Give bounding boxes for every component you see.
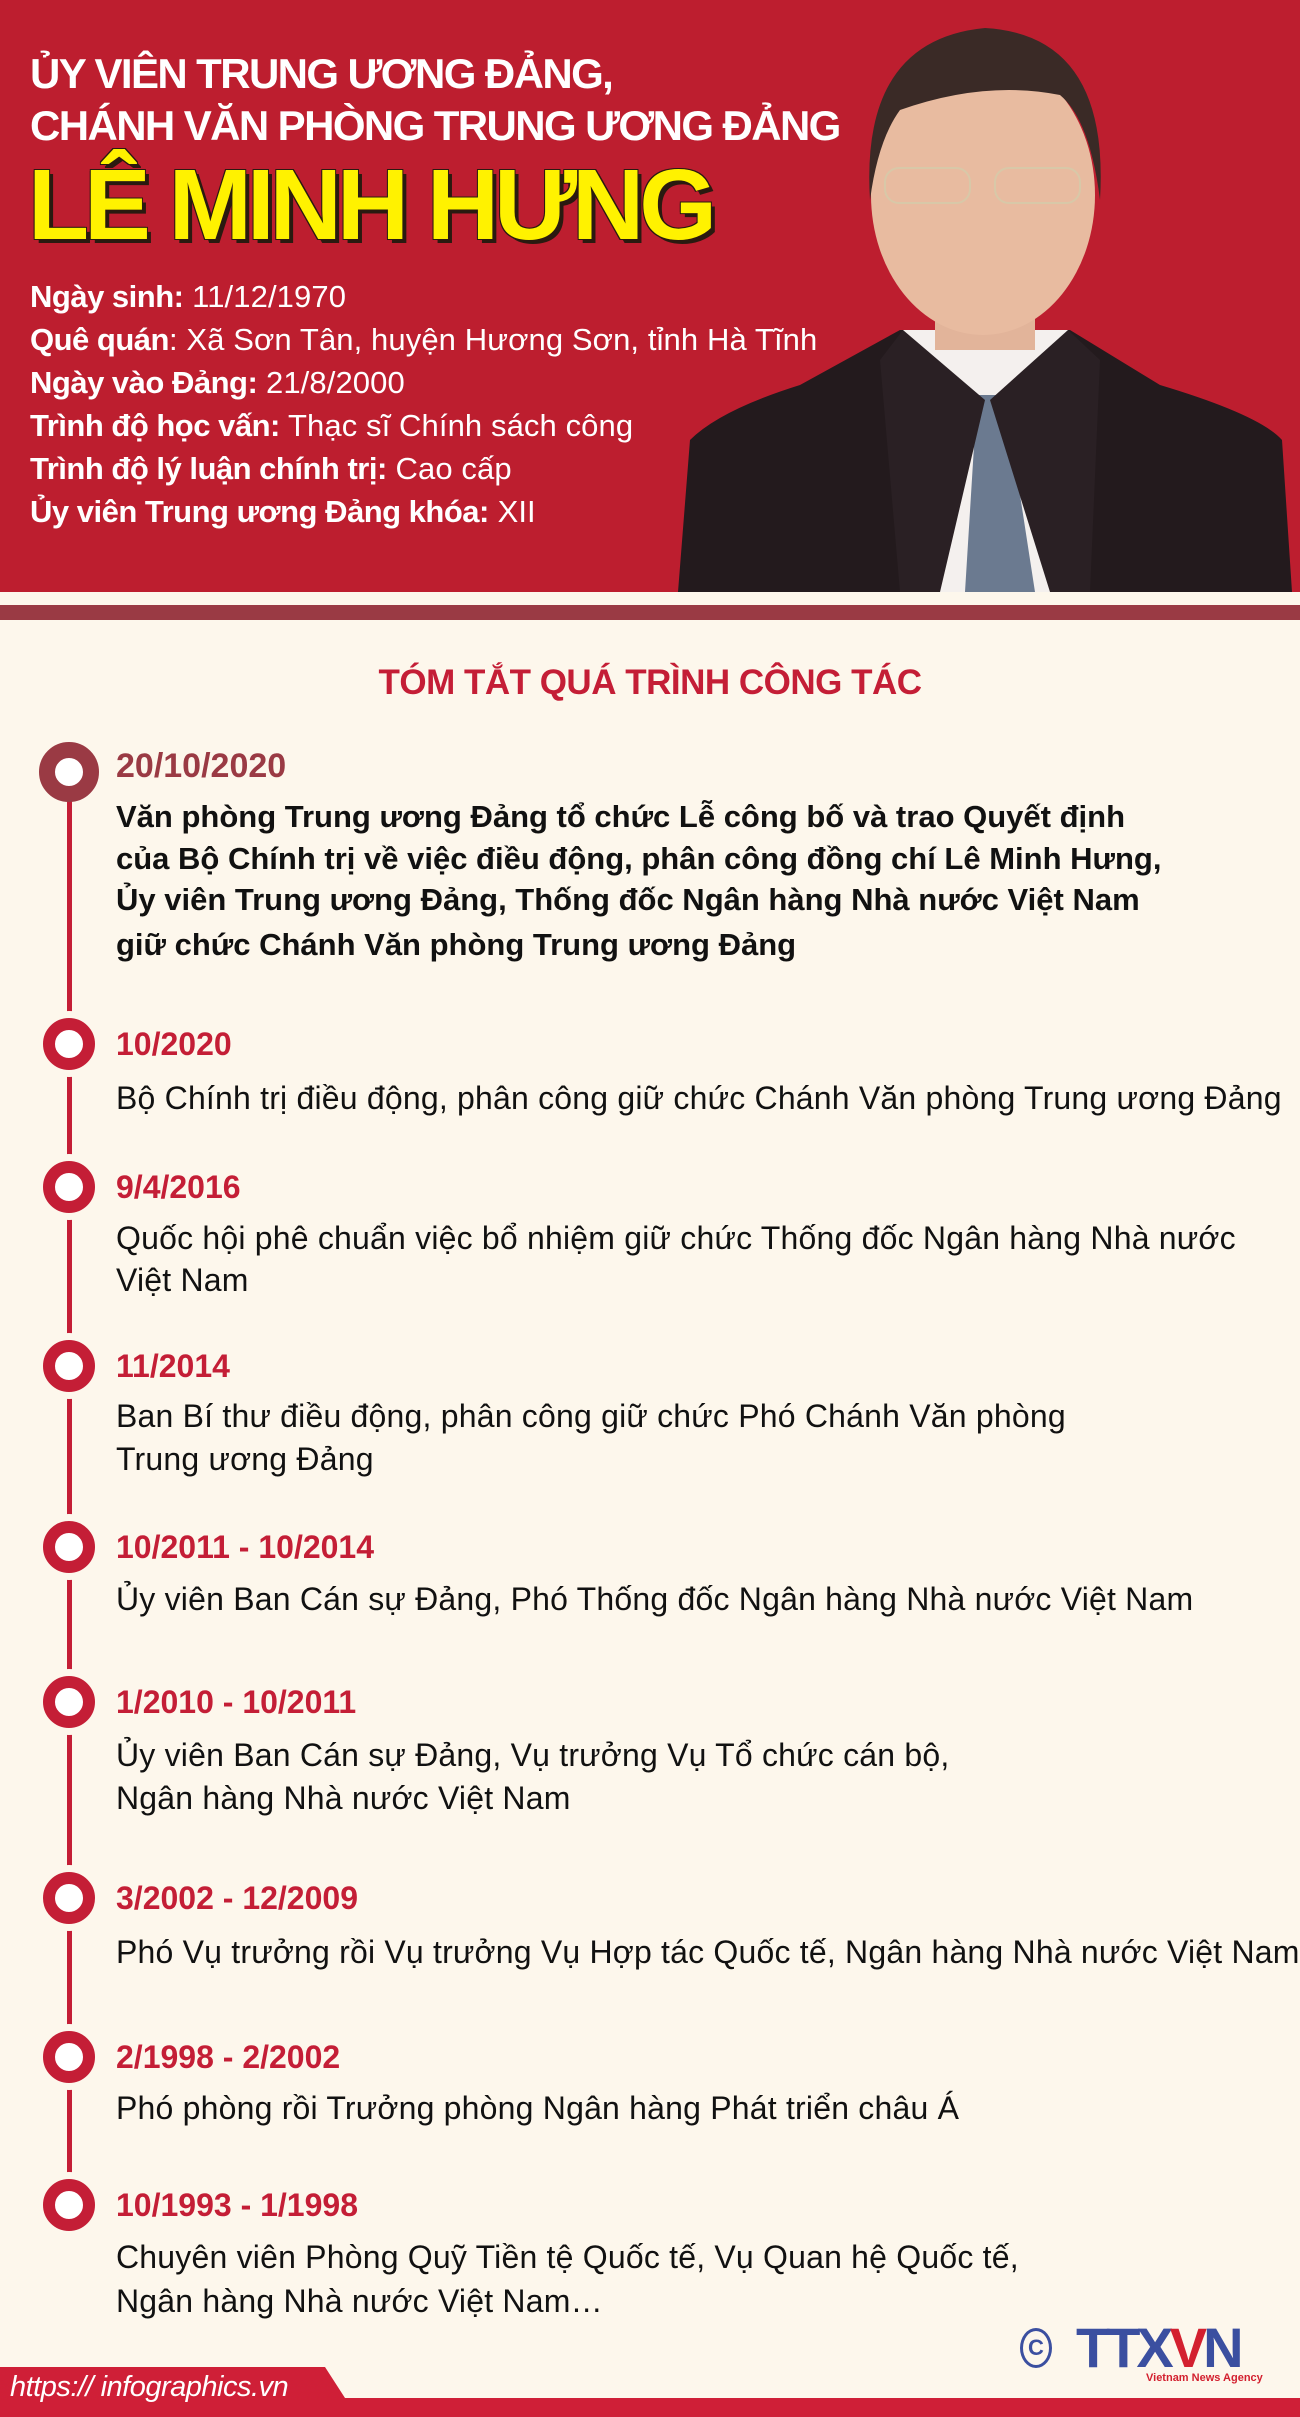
- marker 10/2020: [36, 1011, 102, 1077]
- entry 20/10/2020: 20/10/2020: [116, 747, 286, 785]
- entry 9/4/2016: Quốc hội phê chuẩn việc bổ nhiệm giữ chức Thống đốc Ngân hàng Nhà nước: [116, 1220, 1236, 1256]
- entry 3/2002 - 12/2009: 3/2002 - 12/2009: [116, 1880, 358, 1916]
- logo: TTXVN: C: [1028, 2335, 1044, 2360]
- entry 9/4/2016: 9/4/2016: [116, 1169, 241, 1205]
- entry 1/2010 - 10/2011: 1/2010 - 10/2011: [116, 1684, 356, 1720]
- info block: Quê quán: Xã Sơn Tân, huyện Hương Sơn, tỉnh Hà Tĩnh: [30, 322, 817, 357]
- header stripes: [0, 605, 1300, 620]
- entry 10/2020: [116, 1026, 1282, 1116]
- info block: Trình độ học vấn: Thạc sĩ Chính sách công: [30, 408, 633, 443]
- marker 10/2011: [36, 1514, 102, 1580]
- entry 1/2010 - 10/2011: [116, 1684, 949, 1816]
- title: ỦY VIÊN TRUNG ƯƠNG ĐẢNG,: [30, 50, 612, 97]
- header red panel: [0, 0, 1300, 592]
- entry 20/10/2020: giữ chức Chánh Văn phòng Trung ương Đảng: [116, 927, 796, 962]
- section heading: TÓM TẮT QUÁ TRÌNH CÔNG TÁC: [378, 663, 922, 702]
- title: CHÁNH VĂN PHÒNG TRUNG ƯƠNG ĐẢNG: [30, 102, 840, 149]
- entry 3/2002 - 12/2009: Phó Vụ trưởng rồi Vụ trưởng Vụ Hợp tác Quốc tế, Ngân hàng Nhà nước Việt Nam: [116, 1934, 1300, 1970]
- marker 2/1998: [36, 2024, 102, 2090]
- title: [30, 50, 840, 149]
- entry 20/10/2020: Ủy viên Trung ương Đảng, Thống đốc Ngân hàng Nhà nước Việt Nam: [116, 882, 1140, 917]
- entry 10/2011 - 10/2014: Ủy viên Ban Cán sự Đảng, Phó Thống đốc Ngân hàng Nhà nước Việt Nam: [116, 1581, 1193, 1617]
- info block: Ủy viên Trung ương Đảng khóa: XII: [30, 494, 536, 529]
- photo: portrait illustration: [678, 28, 1292, 592]
- entry 11/2014: [116, 1348, 1066, 1477]
- entry 10/1993 - 1/1998: Chuyên viên Phòng Quỹ Tiền tệ Quốc tế, Vụ Quan hệ Quốc tế,: [116, 2239, 1019, 2275]
- timeline first marker: [39, 742, 99, 802]
- entry 20/10/2020: [116, 747, 1161, 962]
- info block: Ngày sinh: 11/12/1970: [30, 279, 346, 314]
- marker 9/4/2016: [36, 1154, 102, 1220]
- entry 11/2014: Ban Bí thư điều động, phân công giữ chức Phó Chánh Văn phòng: [116, 1398, 1066, 1434]
- entry 20/10/2020: Văn phòng Trung ương Đảng tổ chức Lễ công bố và trao Quyết định: [116, 799, 1125, 834]
- entry 10/1993 - 1/1998: 10/1993 - 1/1998: [116, 2187, 358, 2223]
- entry 10/2011 - 10/2014: 10/2011 - 10/2014: [116, 1529, 374, 1565]
- entry 10/2011 - 10/2014: [116, 1529, 1193, 1617]
- entry 11/2014: 11/2014: [116, 1348, 230, 1384]
- entry 9/4/2016: Việt Nam: [116, 1262, 249, 1298]
- entry 20/10/2020: của Bộ Chính trị về việc điều động, phân công đồng chí Lê Minh Hưng,: [116, 841, 1161, 876]
- entry 10/2020: Bộ Chính trị điều động, phân công giữ chức Chánh Văn phòng Trung ương Đảng: [116, 1080, 1282, 1116]
- entry 1/2010 - 10/2011: Ủy viên Ban Cán sự Đảng, Vụ trưởng Vụ Tổ chức cán bộ,: [116, 1737, 949, 1773]
- entry 10/1993 - 1/1998: [116, 2187, 1019, 2319]
- marker 11/2014: [36, 1333, 102, 1399]
- entry 2/1998 - 2/2002: [116, 2039, 959, 2126]
- marker 10/1993: [36, 2172, 102, 2238]
- info block: Ngày vào Đảng: 21/8/2000: [30, 365, 405, 400]
- entry 2/1998 - 2/2002: Phó phòng rồi Trưởng phòng Ngân hàng Phát triển châu Á: [116, 2090, 959, 2126]
- entry 10/1993 - 1/1998: Ngân hàng Nhà nước Việt Nam…: [116, 2283, 603, 2319]
- info block: [30, 279, 817, 529]
- entry 3/2002 - 12/2009: [116, 1880, 1300, 1970]
- footer url: https:// infographics.vn: [10, 2371, 288, 2403]
- info block: Trình độ lý luận chính trị: Cao cấp: [30, 451, 512, 486]
- logo: TTXVN: [1020, 2316, 1263, 2384]
- logo: TTXVN: TTXVN: [1076, 2316, 1240, 2379]
- entry 9/4/2016: [116, 1169, 1236, 1298]
- logo: TTXVN: Vietnam News Agency: [1146, 2372, 1263, 2384]
- name: LÊ MINH HƯNG: [28, 149, 712, 261]
- marker 3/2002: [36, 1865, 102, 1931]
- entry 10/2020: 10/2020: [116, 1026, 232, 1062]
- entry 11/2014: Trung ương Đảng: [116, 1441, 374, 1477]
- marker 1/2010: [36, 1669, 102, 1735]
- entry 1/2010 - 10/2011: Ngân hàng Nhà nước Việt Nam: [116, 1780, 571, 1816]
- timeline line: [67, 790, 72, 2205]
- entry 2/1998 - 2/2002: 2/1998 - 2/2002: [116, 2039, 340, 2075]
- footer bar: [0, 2367, 1300, 2417]
